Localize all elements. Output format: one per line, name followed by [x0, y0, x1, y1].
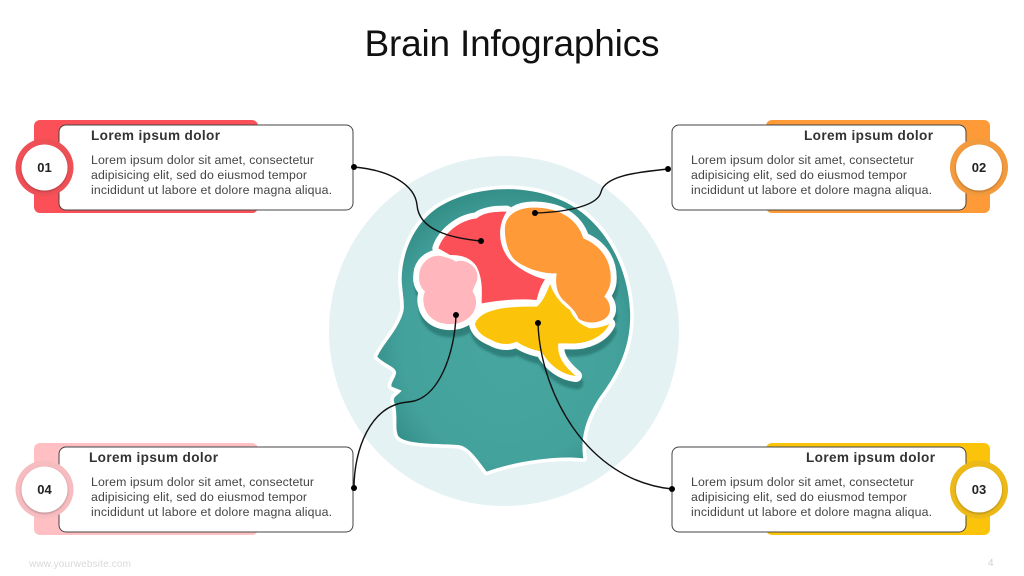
badge 01: 01 [37, 160, 52, 175]
body 02: incididunt ut labore et dolore magna aliqua. [691, 183, 932, 197]
connector 02 [532, 166, 671, 216]
heading 02: Lorem ipsum dolor [804, 128, 934, 143]
brain region: yellow [475, 284, 609, 376]
text card 02 [672, 125, 966, 210]
connector 01 [351, 164, 484, 244]
colored backing 03 [766, 443, 990, 535]
page number: 4 [988, 558, 994, 569]
body 01: incididunt ut labore et dolore magna aliqua. [91, 183, 332, 197]
badge 01 [16, 138, 74, 196]
body 04: incididunt ut labore et dolore magna aliqua. [91, 505, 332, 519]
body 03: Lorem ipsum dolor sit amet, consectetur [691, 475, 914, 489]
head with brain illustration [377, 189, 630, 472]
body 03: adipisicing elit, sed do eiusmod tempor [691, 490, 907, 504]
badge 04 [16, 460, 74, 518]
colored backing 04 [34, 443, 258, 535]
badge 03 [950, 460, 1008, 518]
body 01: Lorem ipsum dolor sit amet, consectetur [91, 153, 314, 167]
panel 01 [16, 120, 353, 213]
brain shadow [420, 215, 612, 383]
body 04: Lorem ipsum dolor sit amet, consectetur [91, 475, 314, 489]
brain region: pink [419, 256, 477, 324]
head silhouette [377, 189, 630, 472]
badge 03: 03 [972, 482, 986, 497]
panel 03 [672, 443, 1008, 535]
body 01: adipisicing elit, sed do eiusmod tempor [91, 168, 307, 182]
body 04 [91, 475, 332, 519]
connector 03 [535, 320, 675, 492]
badge 02 [950, 138, 1008, 196]
title: Brain Infographics [364, 23, 660, 64]
panel 02 [672, 120, 1008, 213]
brain white outline [419, 208, 611, 376]
heading 01: Lorem ipsum dolor [91, 128, 221, 143]
body 02: adipisicing elit, sed do eiusmod tempor [691, 168, 907, 182]
background circle [329, 156, 679, 506]
badge 02: 02 [972, 160, 986, 175]
brain region: orange [505, 208, 611, 322]
heading 04: Lorem ipsum dolor [89, 450, 219, 465]
colored backing 02 [766, 120, 990, 213]
text card 01 [59, 125, 353, 210]
text card 03 [672, 447, 966, 532]
body 01 [91, 153, 332, 197]
heading 03: Lorem ipsum dolor [806, 450, 936, 465]
colored backing 01 [34, 120, 258, 213]
badge 04: 04 [37, 482, 52, 497]
text card 04 [59, 447, 353, 532]
footer website: www.yourwebsite.com [28, 559, 131, 570]
panel 04 [16, 443, 353, 535]
brain region: red [438, 212, 545, 303]
body 02 [691, 153, 932, 197]
connector 04 [351, 312, 459, 491]
body 03 [691, 475, 932, 519]
body 03: incididunt ut labore et dolore magna aliqua. [691, 505, 932, 519]
body 02: Lorem ipsum dolor sit amet, consectetur [691, 153, 914, 167]
body 04: adipisicing elit, sed do eiusmod tempor [91, 490, 307, 504]
